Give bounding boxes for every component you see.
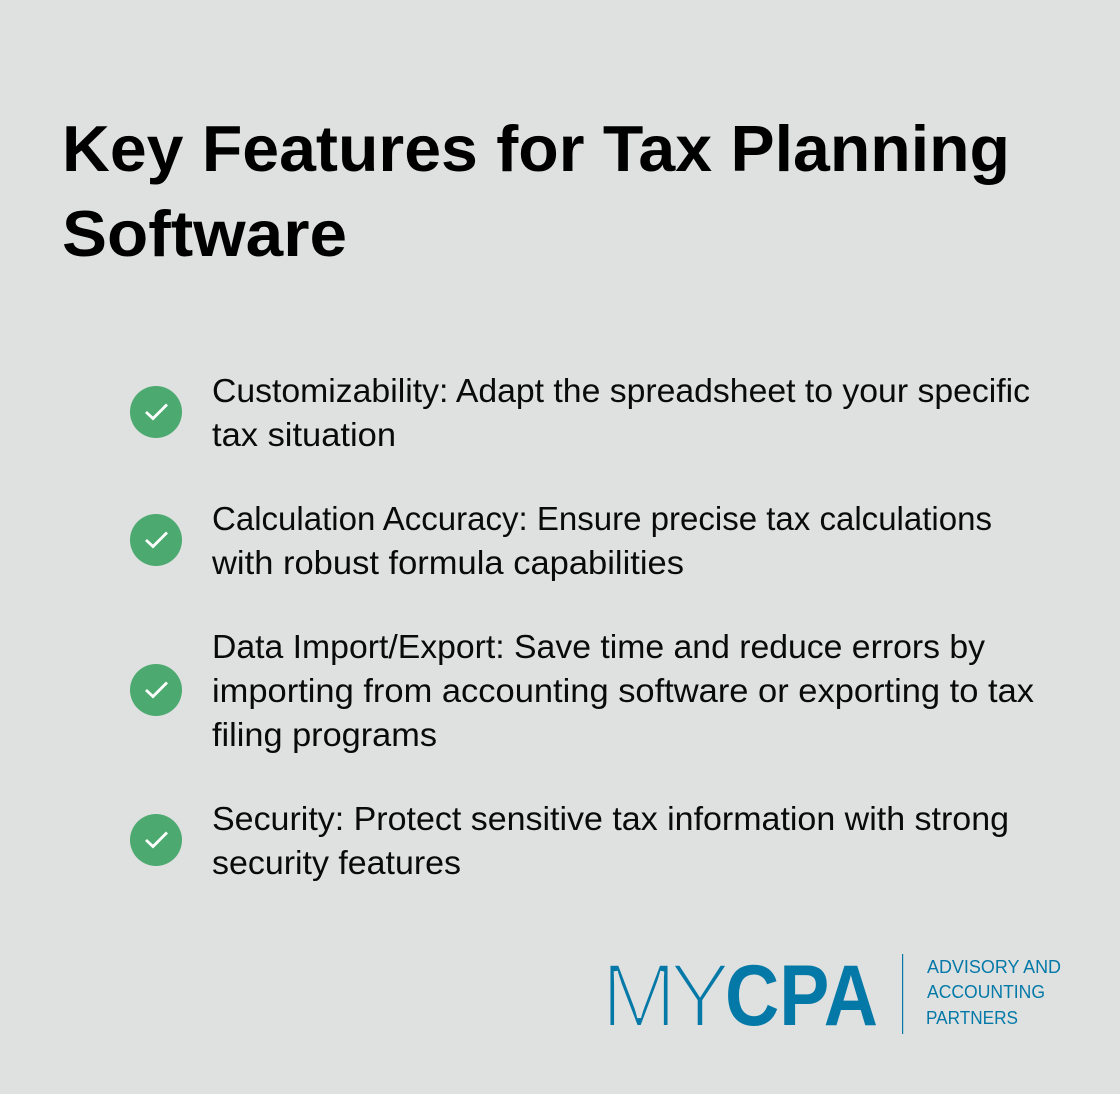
feature text: data import/export: filing programs xyxy=(212,716,437,753)
logo tagline xyxy=(926,957,1061,1028)
logo tagline: ACCOUNTING xyxy=(927,982,1045,1002)
logo divider xyxy=(902,954,903,1034)
feature text: calculation accuracy: Calculation Accuracy: Ensure precise tax calculations xyxy=(212,500,992,537)
icon: check mark xyxy=(130,514,182,566)
feature text: data import/export: Data Import/Export: Save time and reduce errors by xyxy=(212,628,986,665)
feature text: customizability xyxy=(212,372,1030,453)
feature text: calculation accuracy xyxy=(211,500,992,581)
feature text: calculation accuracy: with robust formula capabilities xyxy=(211,544,684,581)
feature list xyxy=(130,372,1035,881)
icon: check mark xyxy=(130,664,182,716)
feature text: data import/export: importing from accounting software or exporting to tax xyxy=(212,672,1035,709)
icon: check mark xyxy=(130,386,182,438)
icon: check mark xyxy=(130,814,182,866)
feature text: data import/export xyxy=(212,628,1035,753)
logo tagline: ADVISORY AND xyxy=(927,957,1061,977)
feature: customizability xyxy=(130,372,1030,453)
feature text: customizability: tax situation xyxy=(212,416,396,453)
logo wordmark: M: M xyxy=(601,945,677,1047)
logo wordmark: Y: Y xyxy=(669,945,731,1047)
feature text: security: security features xyxy=(212,844,461,881)
title xyxy=(62,112,1010,270)
feature: calculation accuracy xyxy=(130,500,992,581)
feature: security xyxy=(130,800,1009,881)
feature text: security xyxy=(212,800,1009,881)
logo tagline: PARTNERS xyxy=(926,1008,1018,1028)
logo xyxy=(601,945,1061,1047)
feature text: security: Security: Protect sensitive tax information with strong xyxy=(212,800,1009,837)
title: Key Features for Tax Planning xyxy=(62,112,1010,185)
feature: data import/export xyxy=(130,628,1035,753)
feature text: customizability: Customizability: Adapt the spreadsheet to your specific xyxy=(212,372,1030,409)
logo wordmark: CPA: CPA xyxy=(725,948,878,1044)
title: Software xyxy=(62,197,347,270)
